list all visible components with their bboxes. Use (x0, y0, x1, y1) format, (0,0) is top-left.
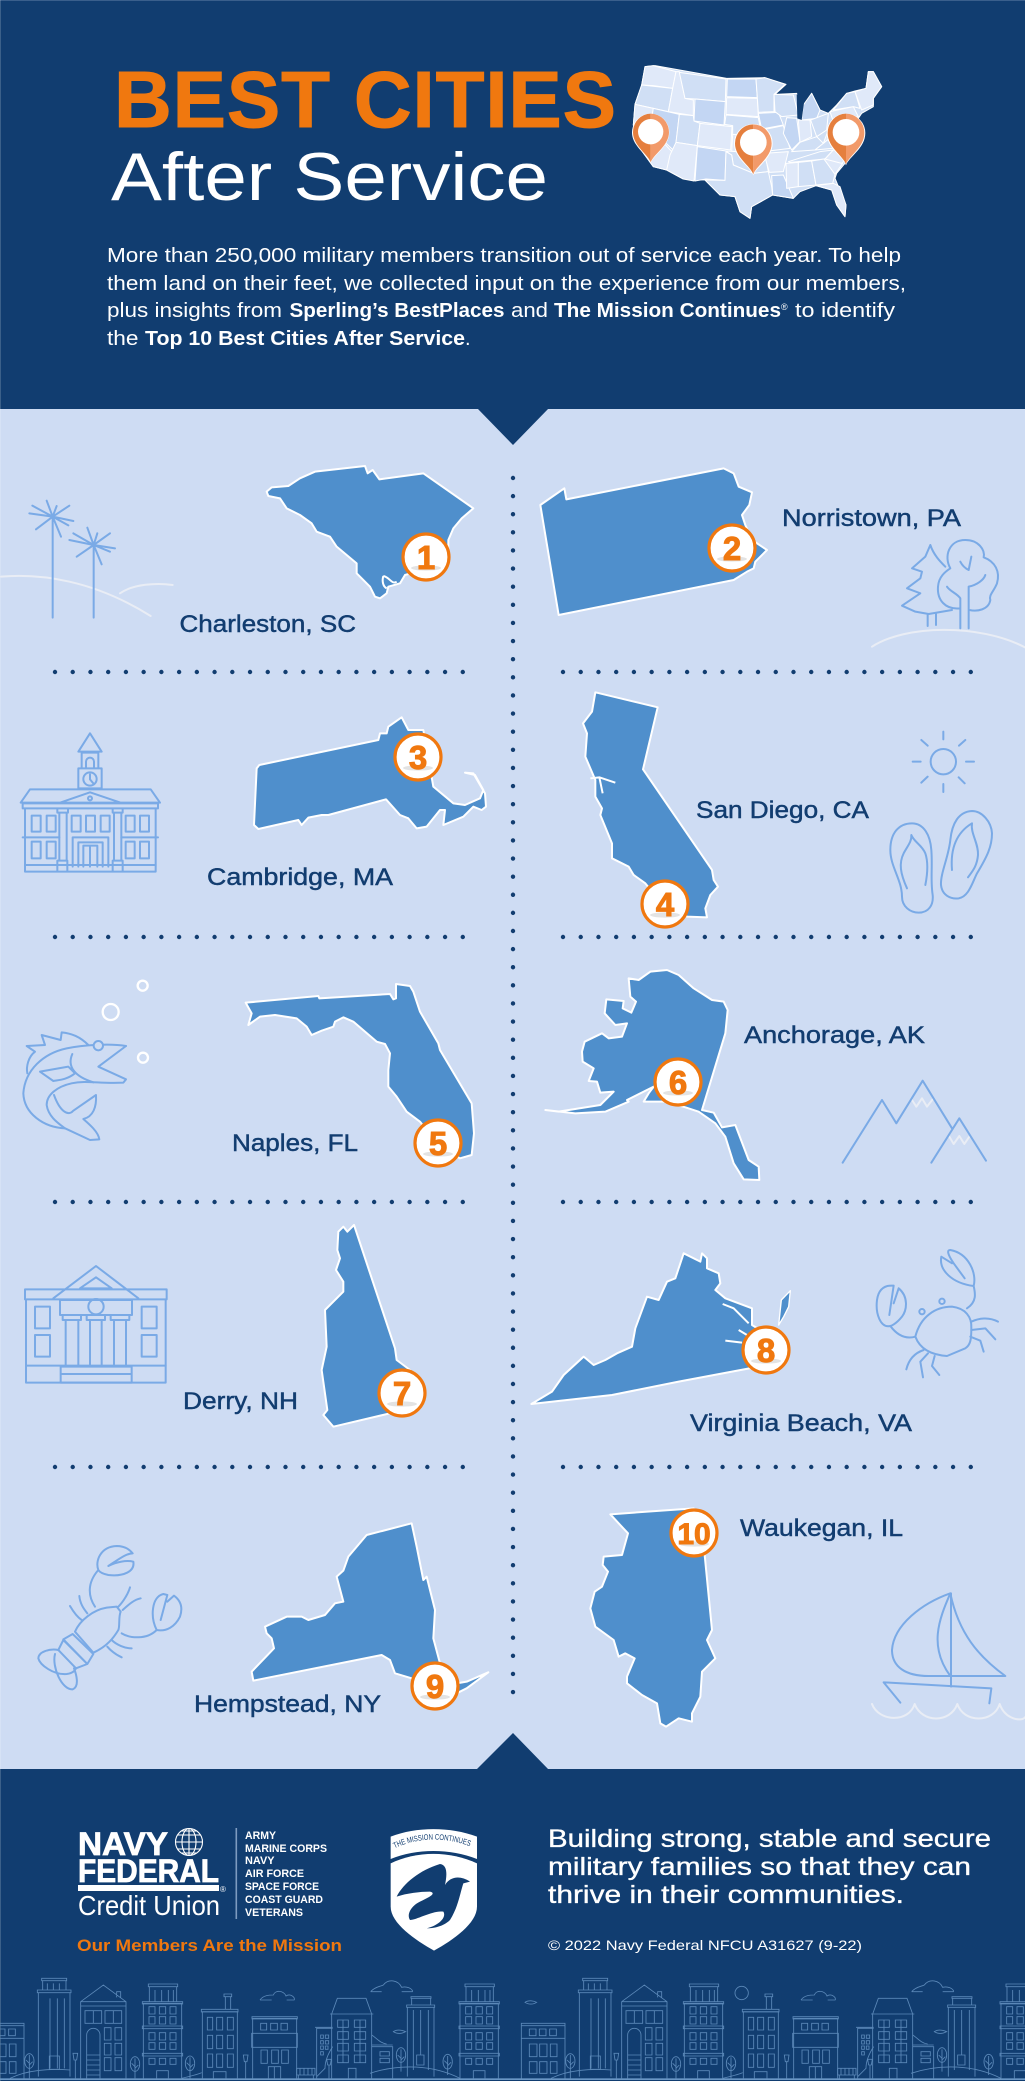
text block: mission statement: thrive in their communities. (548, 1881, 904, 1909)
badge 10 (671, 1510, 717, 1556)
title: After Service (111, 139, 548, 215)
state: New York (252, 1523, 488, 1693)
logo: Navy Federal Credit Union: FEDERAL (78, 1853, 219, 1889)
badge 10: 10 (677, 1518, 711, 1551)
icon: fish with bubbles (23, 981, 148, 1140)
logo: Navy Federal Credit Union: NAVY (78, 1826, 168, 1862)
badge 1 (403, 534, 449, 580)
icon: sailboat (872, 1593, 1025, 1719)
logo: Navy Federal Credit Union: ® (220, 1885, 226, 1894)
text block: service branches: COAST GUARD (245, 1894, 323, 1906)
label: Derry: Derry, NH (183, 1388, 298, 1415)
logo: Navy Federal Credit Union: Credit Union (78, 1890, 220, 1921)
text block: service branches (245, 1830, 327, 1919)
badge 7 (379, 1370, 425, 1416)
icon: mountains (843, 1081, 986, 1163)
text block: introduction: Sperling’s BestPlaces (290, 300, 504, 322)
icon: map pin west (632, 114, 669, 163)
icon: map pin central (734, 124, 773, 175)
text block: introduction: to identify (795, 300, 895, 322)
text block: introduction (107, 245, 906, 350)
label: Norristown: Norristown, PA (782, 505, 961, 532)
center dotted divider (511, 478, 515, 1693)
text block: introduction: and (511, 300, 548, 322)
icon: moon (735, 1986, 748, 2000)
icon: US map with three pins (632, 66, 882, 218)
text block: service branches: AIR FORCE (245, 1868, 304, 1880)
text block: mission statement: military families so that they can (548, 1853, 971, 1881)
state: Pennsylvania (540, 468, 767, 615)
badge 6 (655, 1059, 701, 1105)
badge 7: 7 (393, 1375, 411, 1412)
panel: footer background (0, 1769, 1025, 2081)
icon: courthouse (25, 1266, 167, 1383)
badge 3: 3 (409, 739, 427, 776)
state: South Carolina (267, 466, 473, 598)
icon: map pin east (827, 114, 865, 165)
badge 2 (709, 525, 755, 571)
arrow: header pointer (477, 408, 549, 445)
text block: service branches: MARINE CORPS (245, 1843, 327, 1855)
copyright: © 2022 Navy Federal NFCU A31627 (9-22) (548, 1937, 862, 1953)
illustration: city skyline (0, 1978, 1025, 2080)
text block: service branches: VETERANS (245, 1907, 303, 1919)
state: Florida (246, 984, 474, 1158)
logo: The Mission Continues shield (390, 1829, 477, 1951)
icon: palm trees (1, 501, 173, 618)
text block: introduction: . (465, 328, 471, 350)
label: Hempstead: Hempstead, NY (194, 1691, 381, 1718)
text block: mission statement (548, 1825, 991, 1909)
label: Virginia Beach: Virginia Beach, VA (690, 1410, 912, 1437)
label: Waukegan: Waukegan, IL (740, 1515, 903, 1542)
state: California (583, 692, 718, 917)
text block: introduction: More than 250,000 military members transition out of service each year. To help (107, 245, 901, 267)
text block: service branches: ARMY (245, 1830, 277, 1842)
icon: globe (176, 1828, 202, 1856)
panel: city list background (0, 409, 1025, 1769)
badge 8: 8 (757, 1332, 775, 1369)
badge 8 (743, 1327, 789, 1373)
text block: service branches: SPACE FORCE (245, 1881, 319, 1893)
state: Virginia (531, 1253, 790, 1404)
state: Massachusetts (254, 717, 486, 829)
label: Cambridge: Cambridge, MA (207, 864, 393, 891)
badge 2: 2 (723, 530, 741, 567)
badge 5 (415, 1120, 461, 1166)
icon: town hall (21, 733, 160, 872)
tagline: Our Members Are the Mission (77, 1936, 342, 1955)
badge 9 (412, 1663, 458, 1709)
state: Illinois (590, 1508, 715, 1727)
text block: introduction: them land on their feet, we collected input on the experience from our members, (107, 273, 906, 295)
label: Charleston: Charleston, SC (180, 611, 356, 638)
icon: sun and flip flops (890, 732, 992, 913)
title: BEST CITIES (114, 55, 616, 144)
badge 9: 9 (426, 1668, 444, 1705)
badge 1: 1 (417, 539, 435, 576)
state: New Hampshire (322, 1225, 413, 1427)
badge 6: 6 (669, 1064, 687, 1101)
badge 3 (395, 734, 441, 780)
text block: service branches: NAVY (245, 1855, 275, 1867)
panel: header background (0, 0, 1025, 409)
label: San Diego: San Diego, CA (696, 797, 869, 824)
text block: introduction: The Mission Continues (554, 300, 781, 322)
title (111, 55, 616, 215)
badge 4: 4 (656, 886, 675, 923)
text block: introduction: Top 10 Best Cities After Service (145, 328, 465, 350)
label: Naples: Naples, FL (232, 1130, 358, 1157)
icon: trees (872, 540, 1025, 647)
state: Alaska (545, 970, 759, 1180)
text block: mission statement: Building strong, stable and secure (548, 1825, 991, 1853)
text block: introduction: ® (781, 302, 788, 312)
icon: lobster (38, 1546, 181, 1689)
label: Anchorage: Anchorage, AK (744, 1022, 925, 1049)
icon: small cloud (525, 2001, 537, 2004)
arrow: footer pointer (476, 1733, 549, 1770)
logo: Navy Federal Credit Union (78, 1826, 226, 1921)
badge 4 (642, 881, 688, 927)
text block: introduction: plus insights from (107, 300, 282, 322)
icon: crab (877, 1250, 998, 1377)
text block: introduction: the (107, 328, 138, 350)
badge 5: 5 (429, 1125, 447, 1162)
logo: The Mission Continues shield: THE MISSION CONTINUES (392, 1834, 471, 1848)
